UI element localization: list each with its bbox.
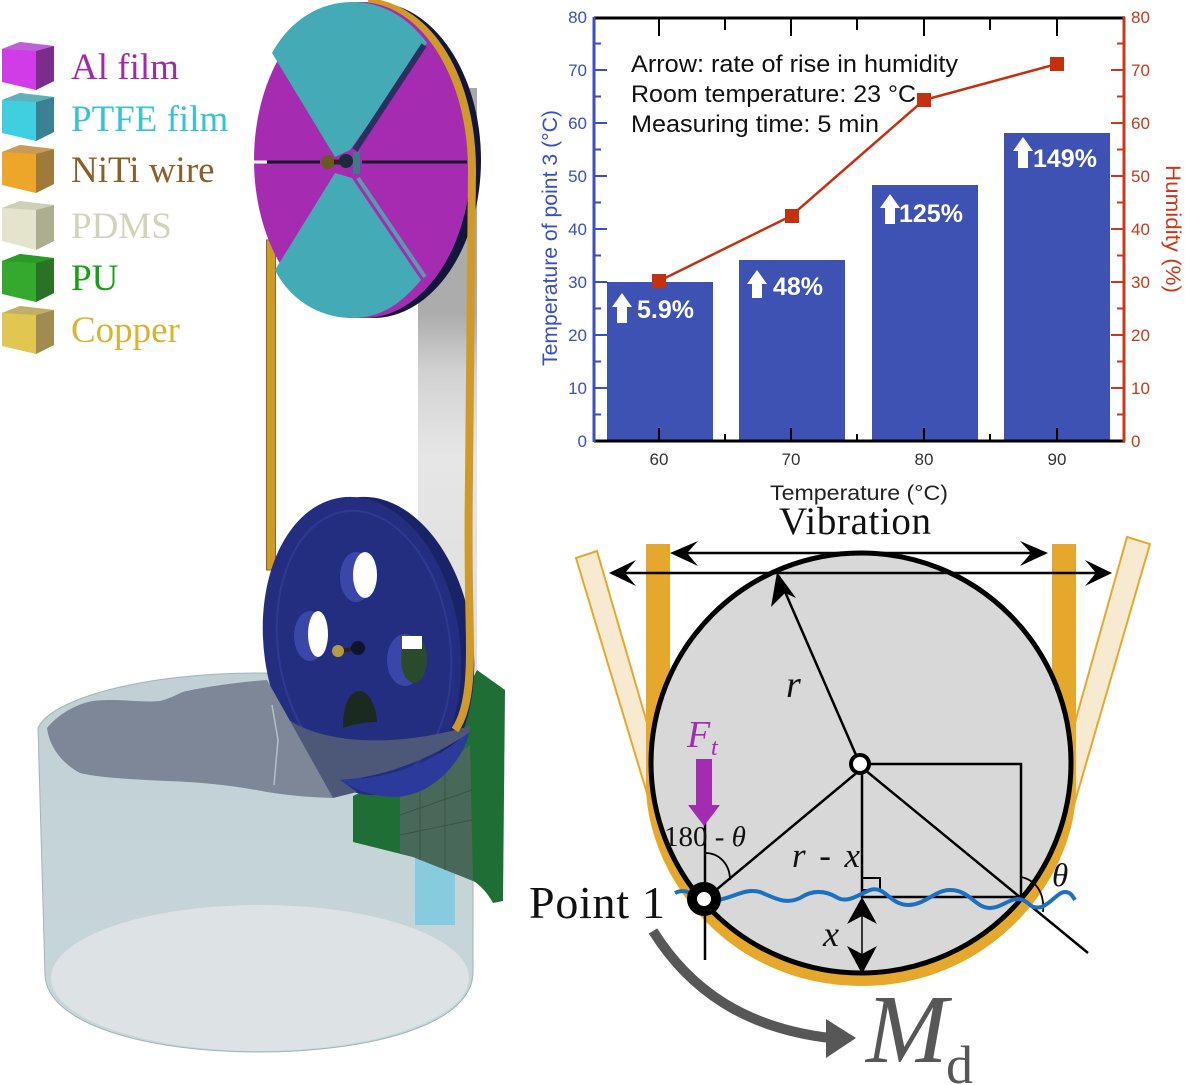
legend item: Al film: Al film	[71, 47, 179, 88]
legend: material swatches and names	[2, 42, 228, 354]
left axis labels: 10	[568, 379, 587, 398]
chart: temperature and humidity	[539, 8, 1184, 505]
cyan column behind glass	[415, 855, 455, 925]
x axis labels: 80	[915, 450, 933, 469]
x axis title: Temperature (°C)	[770, 482, 948, 505]
point 1 label: Point 1	[529, 877, 665, 928]
left axis title: Temperature of point 3 (°C)	[539, 110, 562, 366]
beaker floor	[51, 905, 469, 1051]
pulley holes	[294, 552, 427, 728]
glass beaker	[38, 673, 473, 1052]
legend item: PDMS: PDMS	[71, 206, 172, 247]
chart annotation: Measuring time: 5 min	[631, 111, 879, 138]
disc gaps and edges	[254, 45, 467, 277]
right axis labels: 50	[1131, 167, 1150, 186]
PU green sheet	[353, 670, 505, 903]
upper disc front: PTFE sectors	[272, 2, 427, 318]
legend item: Copper	[2, 306, 180, 354]
left axis labels: 40	[568, 220, 587, 239]
x axis ticks	[659, 18, 1057, 441]
legend item: NiTi wire	[2, 145, 215, 193]
right axis labels: 60	[1131, 114, 1150, 133]
support post	[418, 88, 477, 680]
labels: r - x	[792, 836, 860, 875]
NiTi belt right	[368, 2, 472, 730]
bars	[607, 133, 1110, 441]
right axis labels: 30	[1131, 273, 1150, 292]
vibration arrows	[609, 541, 1112, 586]
left axis labels: 60	[568, 114, 587, 133]
water surface	[47, 680, 333, 798]
labels: 180 - θ	[664, 821, 746, 853]
bar arrows and rate labels: 5.9%	[637, 296, 694, 324]
left axis labels: 30	[568, 273, 587, 292]
plot frame	[594, 17, 1125, 442]
height arrows	[847, 897, 877, 974]
copper strip	[646, 544, 1076, 986]
pulley crescent below waterline	[340, 730, 470, 797]
bar arrows and rate labels: 48%	[773, 273, 823, 301]
upper disc front: Al sectors	[254, 2, 466, 318]
right axis labels: 70	[1131, 61, 1150, 80]
pulley submerged patch	[280, 712, 470, 798]
point 1 marker	[692, 887, 716, 911]
right axis title: Humidity (%)	[1161, 165, 1184, 293]
tension force: F	[686, 714, 711, 756]
disc axle	[321, 152, 360, 174]
radius arrowhead	[771, 572, 796, 607]
x axis labels	[650, 450, 1066, 469]
vibration heading: Vibration	[779, 500, 931, 543]
right axis labels: 20	[1131, 326, 1150, 345]
wavy wire	[675, 889, 1075, 908]
tension force: t	[711, 735, 719, 761]
legend item: Copper: Copper	[71, 310, 180, 351]
x axis labels: 60	[650, 450, 668, 469]
humidity line	[652, 57, 1064, 288]
bent strips pale	[576, 537, 1150, 810]
moment label: M	[864, 976, 953, 1084]
right axis labels: 80	[1131, 8, 1150, 27]
force diagram	[529, 500, 1150, 1085]
chart annotation: Arrow: rate of rise in humidity	[631, 51, 958, 78]
labels: θ	[1052, 858, 1068, 894]
chart annotation	[631, 51, 958, 138]
upper disc back plates	[257, 2, 481, 318]
legend item: PTFE film	[2, 93, 228, 141]
NiTi belt left	[266, 240, 276, 570]
3D device illustration	[38, 2, 505, 1052]
bar arrows and rate labels	[612, 137, 1097, 324]
disc cross-section	[651, 553, 1071, 973]
left axis labels	[568, 8, 587, 451]
geometry lines	[704, 578, 1088, 960]
left axis labels: 70	[568, 61, 587, 80]
labels: x	[822, 914, 839, 954]
right axis labels: 0	[1131, 432, 1140, 451]
tension force	[686, 714, 720, 826]
bar arrows and rate labels: 125%	[899, 200, 963, 228]
x axis labels: 90	[1048, 450, 1066, 469]
left axis labels: 20	[568, 326, 587, 345]
labels	[664, 664, 1068, 954]
legend item: Al film	[2, 42, 179, 90]
lower pulley	[244, 484, 493, 808]
left axis labels: 80	[568, 8, 587, 27]
right axis ticks	[1111, 44, 1124, 414]
moment arrow	[653, 931, 856, 1058]
right axis labels: 10	[1131, 379, 1150, 398]
right axis labels	[1131, 8, 1150, 451]
bar arrows and rate labels: 149%	[1033, 145, 1097, 173]
left axis labels: 50	[568, 167, 587, 186]
labels: r	[786, 664, 801, 706]
centre marker	[851, 755, 869, 773]
legend item: PTFE film: PTFE film	[71, 99, 228, 140]
legend item: PU: PU	[71, 258, 118, 299]
x axis labels: 70	[782, 450, 800, 469]
legend item: PDMS	[2, 201, 172, 250]
left axis labels: 0	[578, 432, 587, 451]
pulley axle	[332, 641, 365, 657]
legend item: PU	[2, 254, 118, 302]
left axis ticks	[594, 44, 607, 414]
chart annotation: Room temperature: 23 °C	[631, 81, 916, 108]
right axis labels: 40	[1131, 220, 1150, 239]
legend item: NiTi wire: NiTi wire	[71, 150, 215, 191]
